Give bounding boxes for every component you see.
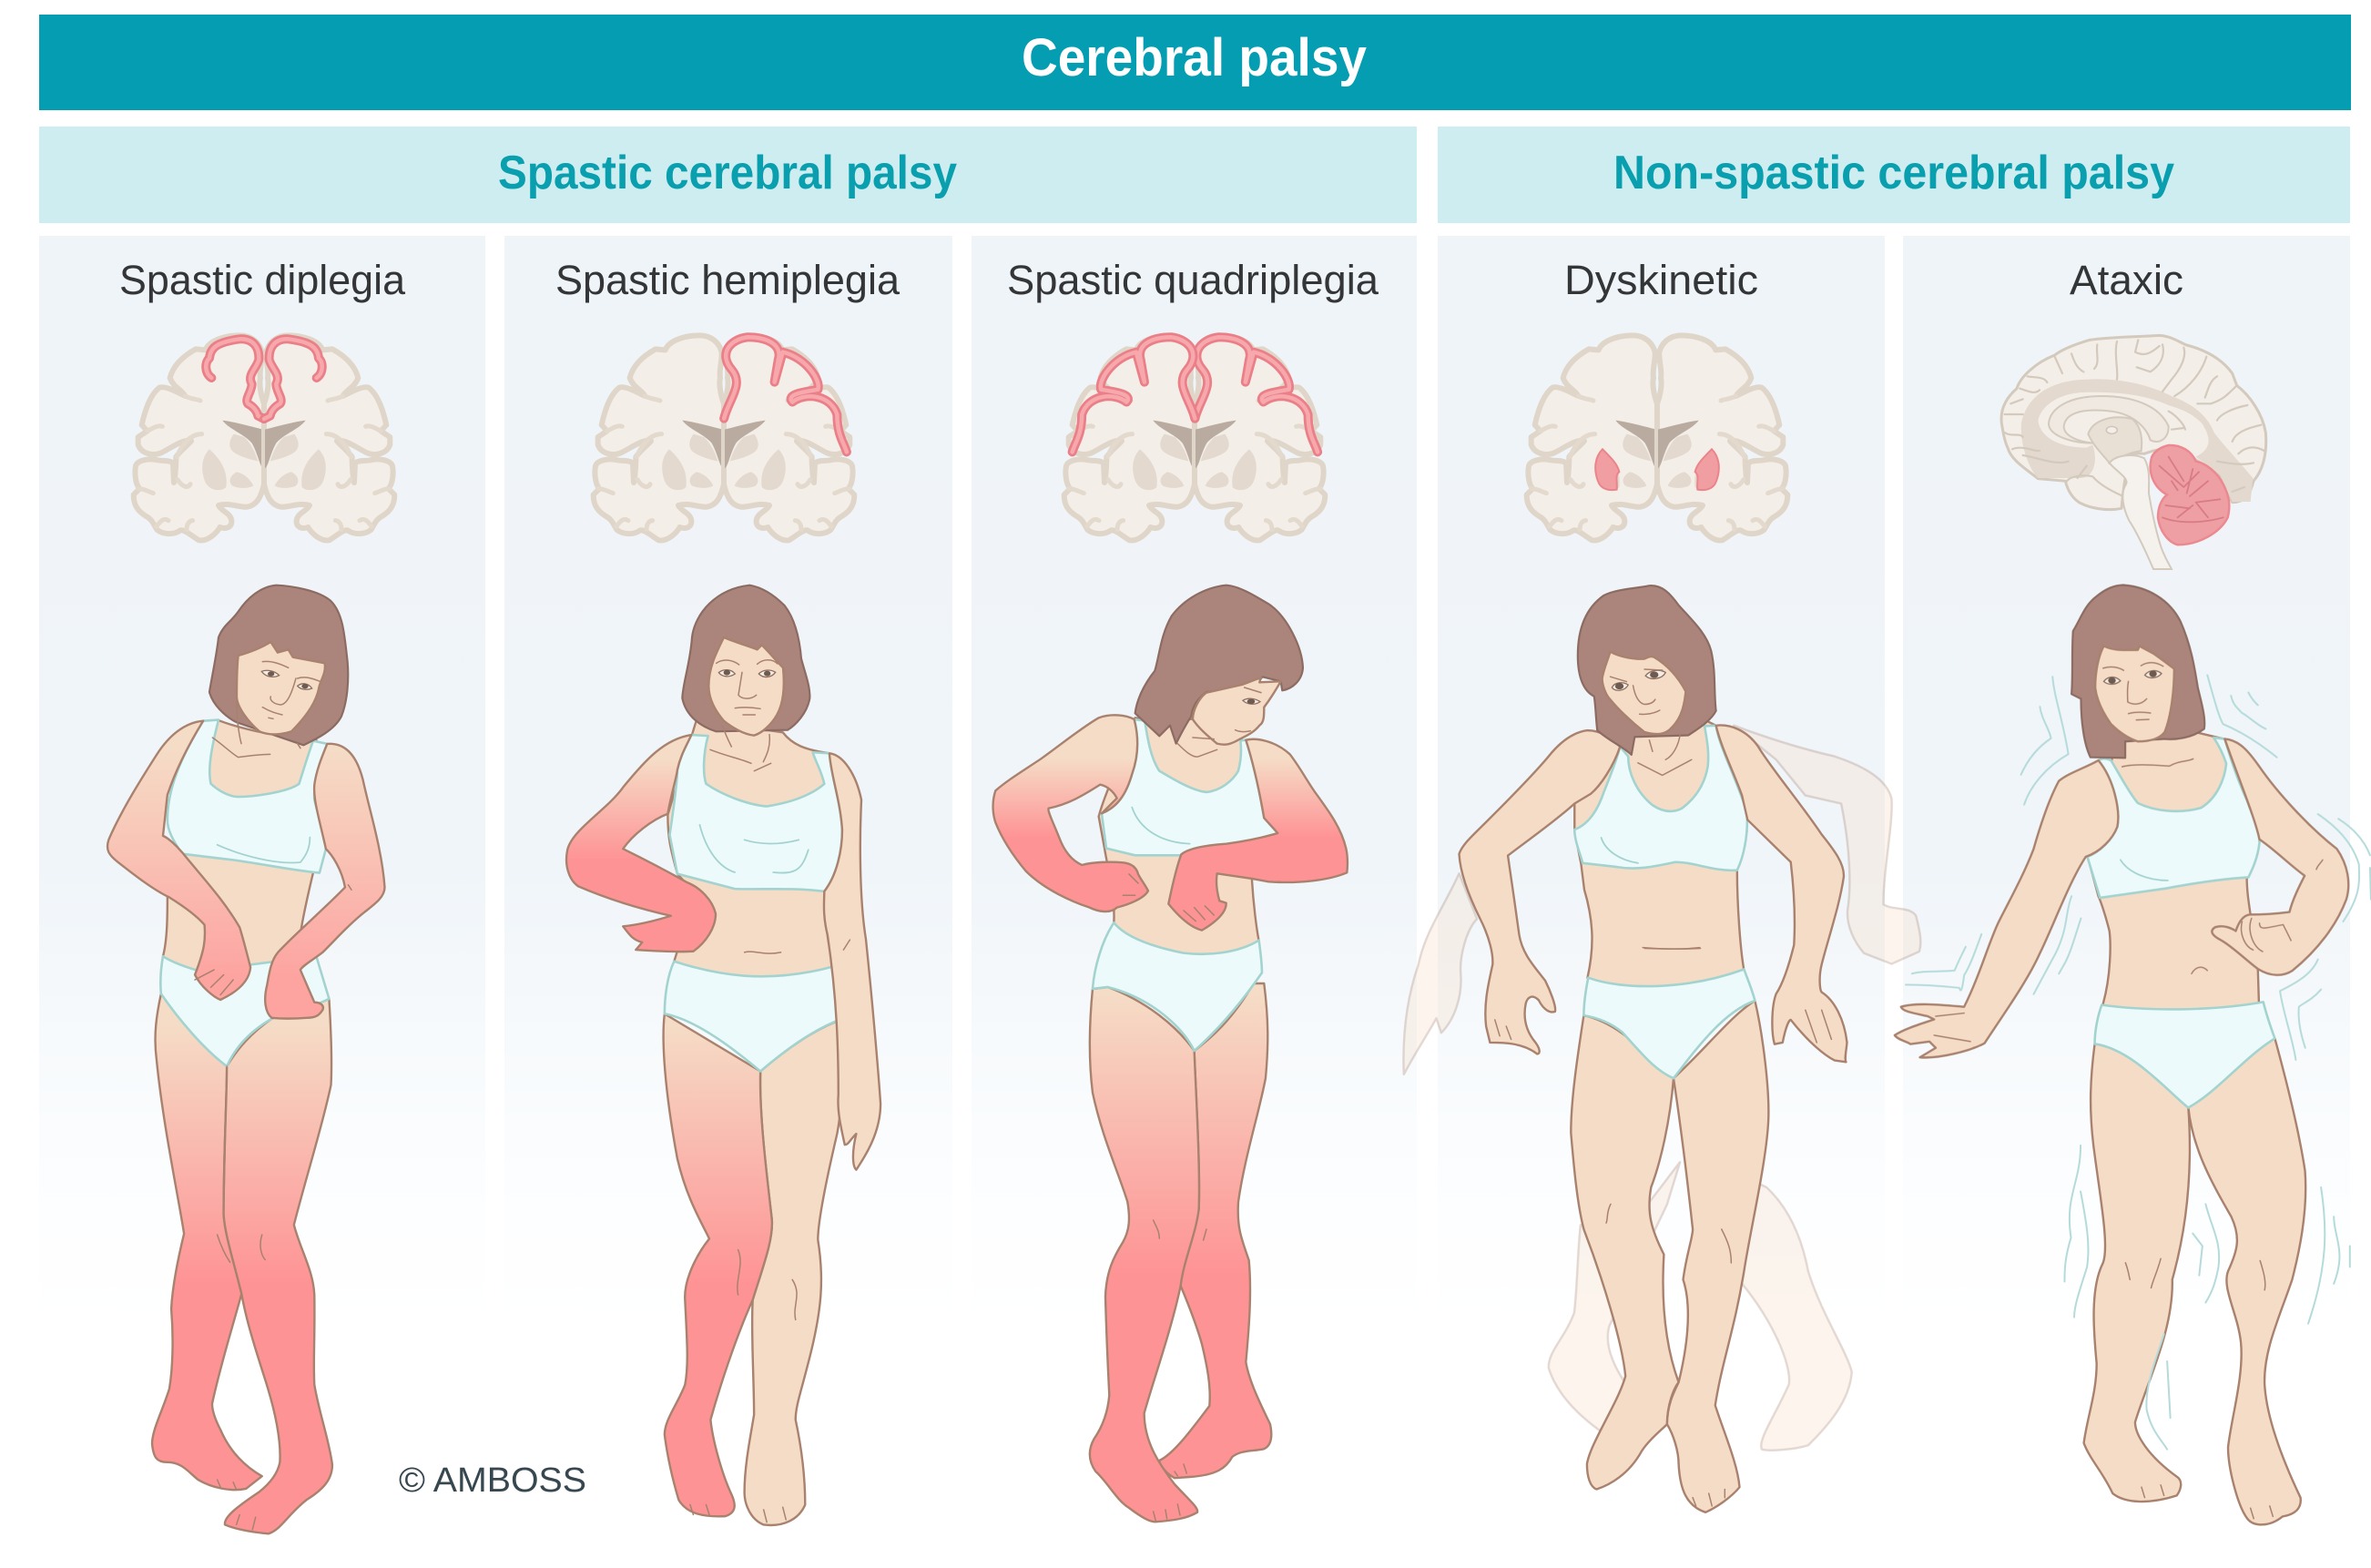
panel: spastic diplegia [39, 236, 485, 1329]
panel: spastic hemiplegia [504, 236, 952, 1329]
hair [1135, 585, 1303, 744]
upper body [1459, 585, 1847, 1062]
panel: ataxic [1903, 236, 2350, 1329]
tremor lines: legs [2064, 1145, 2350, 1450]
legs and underwear [1571, 948, 1768, 1512]
face [1193, 677, 1281, 745]
knee creases [1154, 1220, 1206, 1521]
torso [163, 720, 320, 980]
figure: spastic hemiplegia, red right side [566, 585, 880, 1525]
left arm [993, 715, 1148, 911]
torso [1574, 720, 1747, 997]
panel: spastic quadriplegia [972, 236, 1417, 1329]
limb detail lines [195, 885, 351, 1530]
panel: spastic quadriplegia: Spastic quadriplegia [1007, 257, 1379, 303]
right arm [1716, 725, 1847, 1062]
left arm [107, 721, 250, 1000]
bra [1102, 719, 1277, 855]
hair [682, 585, 809, 731]
torso [667, 720, 839, 987]
brain: dyskinetic, basal ganglia highlighted [1527, 335, 1787, 540]
title bar [39, 15, 2351, 110]
heading: spastic cerebral palsy: Spastic cerebral palsy [498, 147, 957, 199]
left leg [152, 993, 262, 1490]
ghost arms [1403, 726, 1920, 1074]
face [1603, 652, 1685, 734]
torso [2087, 732, 2259, 1020]
heading: non-spastic cerebral palsy: Non-spastic cerebral palsy [1613, 147, 2174, 199]
right leg [224, 999, 332, 1533]
skin leg [745, 1019, 843, 1525]
facial features [710, 660, 778, 771]
facial features [1495, 669, 1831, 1043]
ghost legs [1549, 1162, 1852, 1451]
head [682, 585, 809, 771]
right arm [2212, 738, 2348, 975]
title bar: Cerebral palsy [1022, 28, 1367, 87]
figure: spastic quadriplegia, all limbs red [993, 585, 1348, 1522]
panel: ataxic: Ataxic [2070, 257, 2183, 303]
left arm [1459, 730, 1620, 1054]
ghost limbs [1403, 726, 1920, 1451]
panel: dyskinetic [1438, 236, 1885, 1329]
hair [2071, 585, 2204, 758]
skin arm [824, 753, 880, 1170]
facial features [212, 661, 321, 758]
heading: spastic cerebral palsy [39, 127, 1417, 223]
figure: spastic diplegia, red legs and arms [107, 585, 384, 1533]
detail lines [699, 825, 809, 873]
red arm [566, 735, 716, 952]
underwear [665, 962, 842, 1072]
facial features and hand lines [1123, 687, 1281, 921]
hair [209, 585, 348, 745]
facial features and hand lines [1934, 663, 2323, 1042]
panel: spastic diplegia: Spastic diplegia [119, 257, 406, 303]
torso [1099, 717, 1266, 965]
bra [168, 720, 327, 873]
bra [2087, 738, 2259, 898]
upper body [1895, 585, 2371, 1060]
left arm [1895, 760, 2118, 1057]
panel: spastic hemiplegia: Spastic hemiplegia [555, 257, 901, 303]
right arm [265, 744, 384, 1019]
figure: dyskinetic, with ghost limbs showing involuntary movement [1403, 585, 1920, 1512]
underwear [1093, 922, 1262, 1051]
right leg [1159, 983, 1271, 1478]
heading: non-spastic cerebral palsy [1438, 127, 2350, 223]
bra [669, 735, 842, 891]
brain: hemiplegia, one hemisphere highlighted [594, 335, 854, 540]
figure: ataxic, with tremor lines [1895, 585, 2371, 1524]
legs [1090, 983, 1271, 1522]
tremor lines: upper body [1906, 675, 2371, 1060]
legs and underwear [2064, 1002, 2350, 1524]
underwear [160, 956, 329, 1066]
panel: dyskinetic: Dyskinetic [1564, 257, 1758, 303]
bra [1574, 726, 1747, 871]
red leg [664, 1013, 772, 1516]
hair [1578, 585, 1716, 755]
face [237, 642, 325, 734]
left leg [1090, 987, 1199, 1522]
face [2095, 647, 2174, 741]
brain: quadriplegia, both hemispheres highlighted [1064, 335, 1325, 540]
head [209, 585, 348, 758]
right arm [1168, 739, 1348, 931]
brain: diplegia, medial motor cortex highlighted [134, 335, 394, 540]
copyright: © AMBOSS [399, 1461, 586, 1500]
brain: ataxic, cerebellum highlighted [2001, 335, 2266, 569]
face [708, 637, 784, 736]
